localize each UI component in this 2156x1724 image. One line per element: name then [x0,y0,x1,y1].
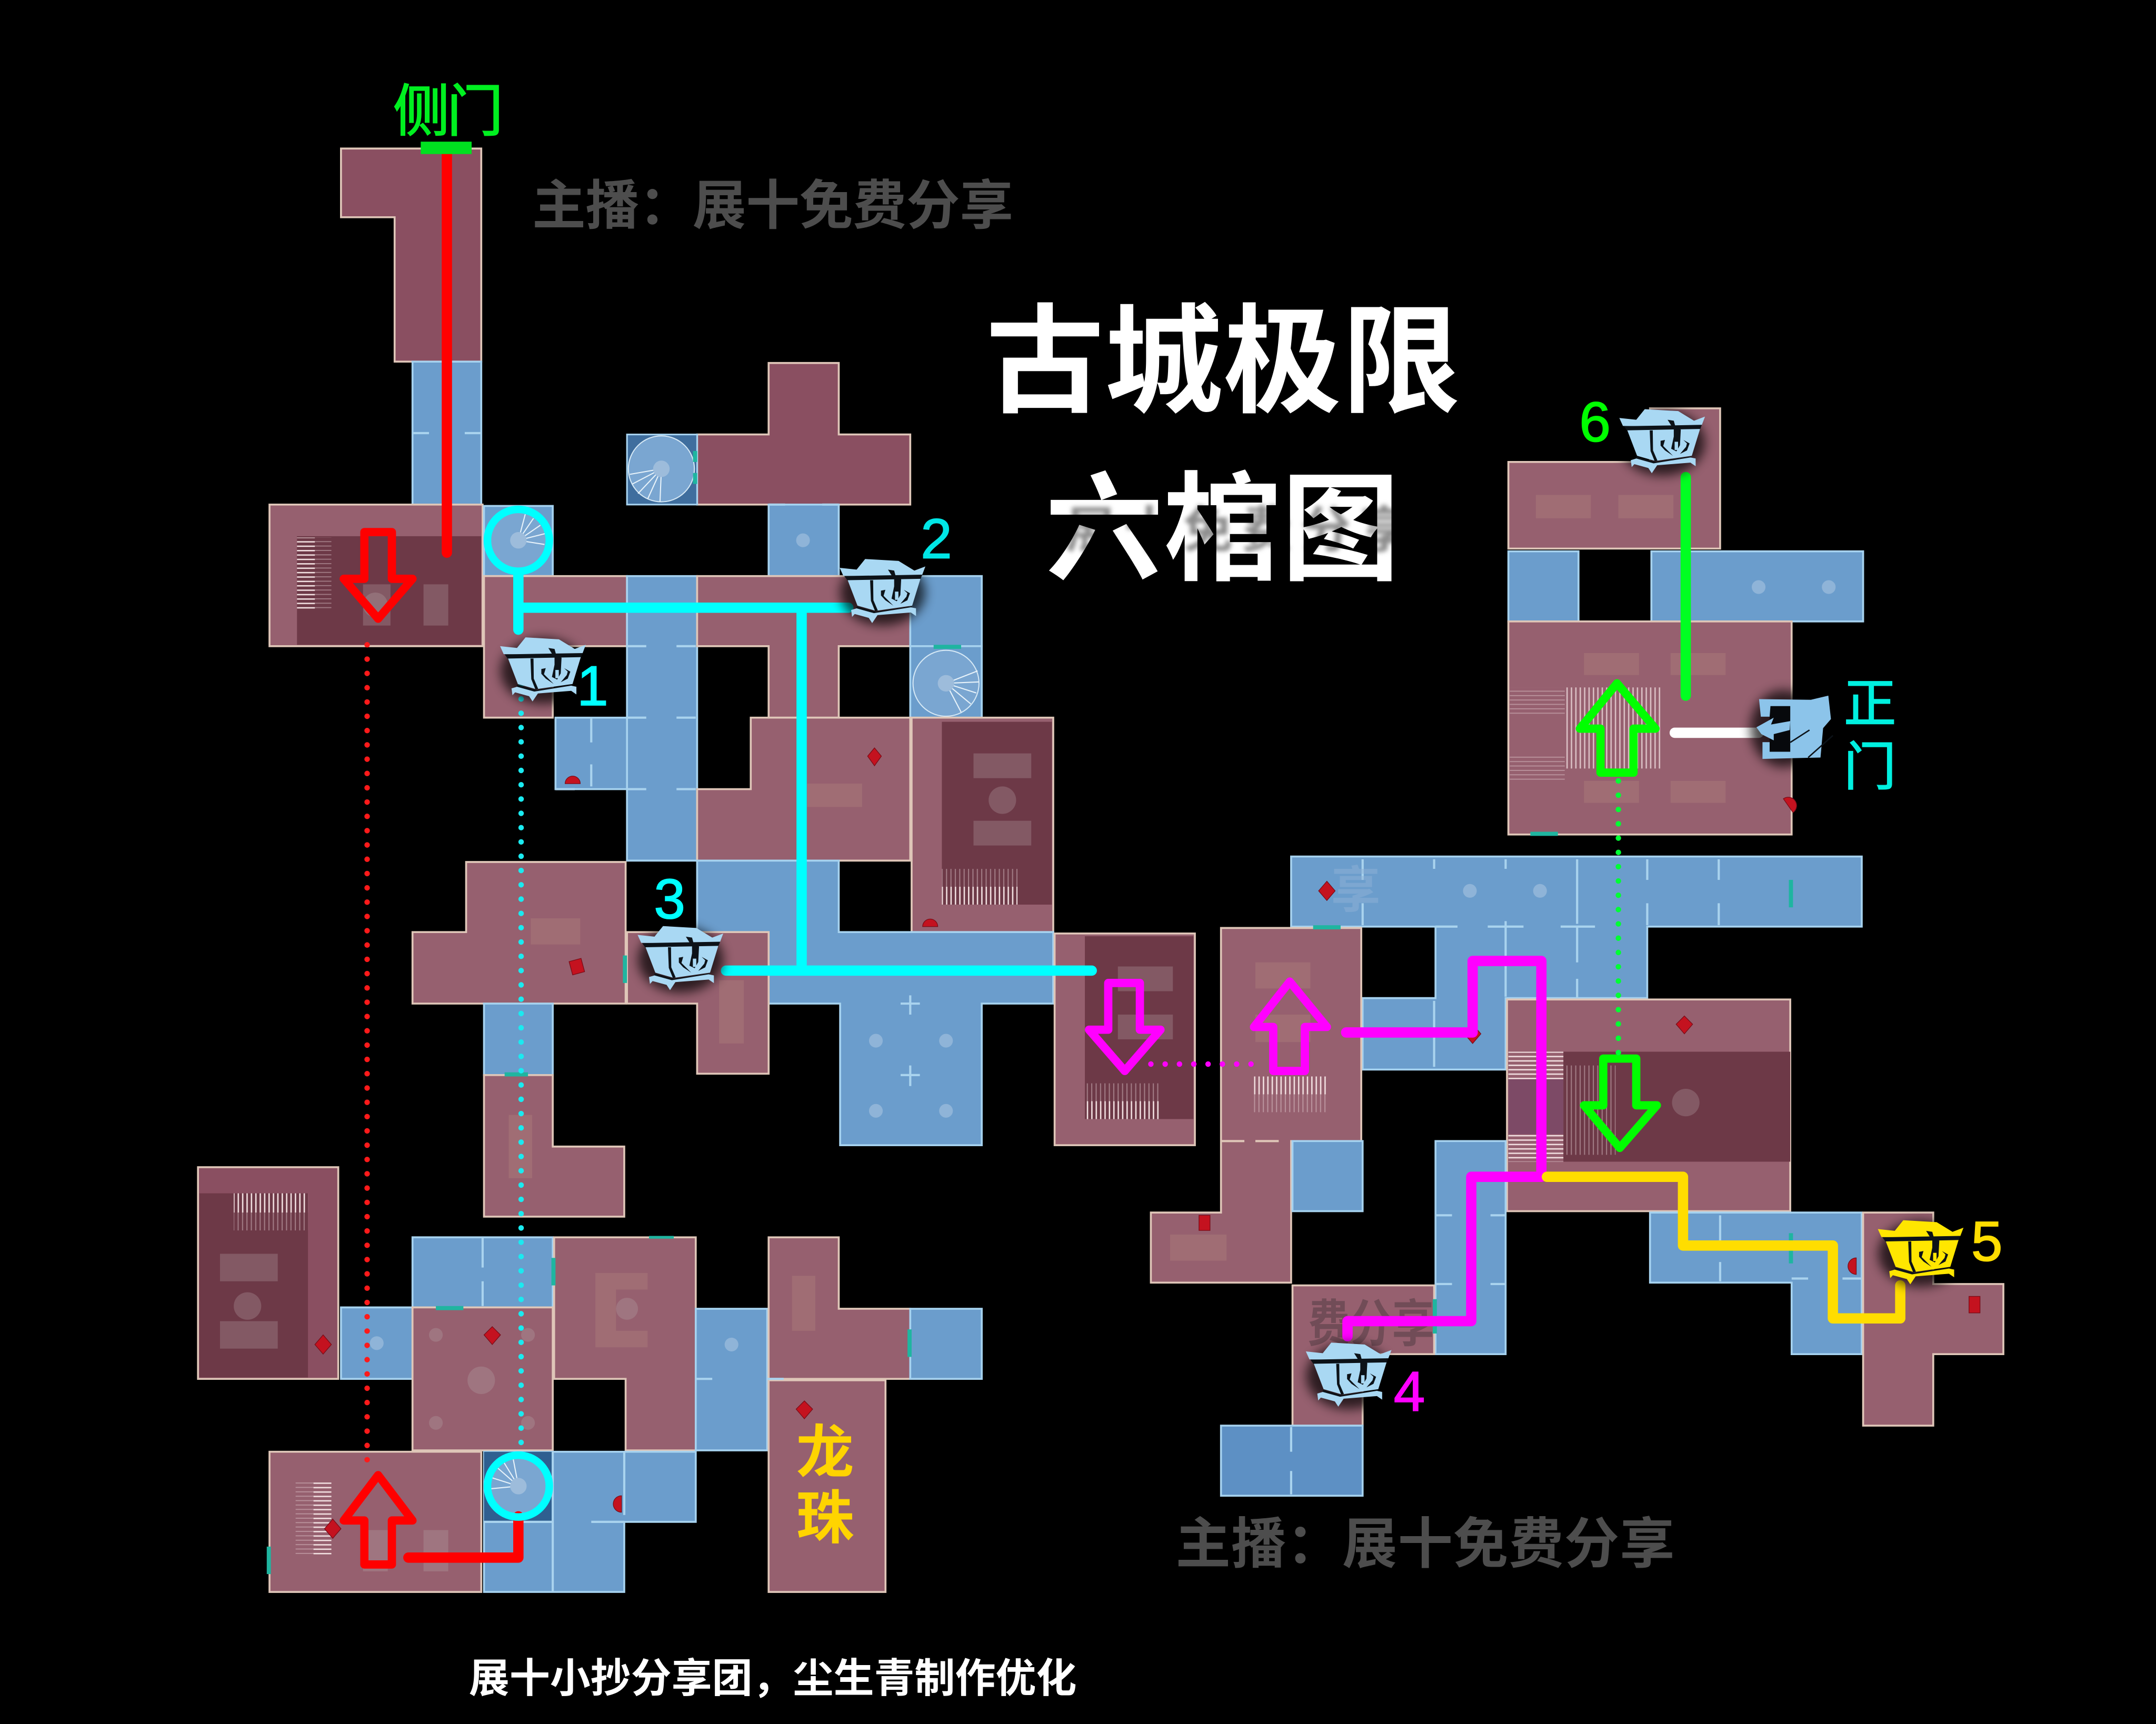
route: cyan spiral marker bottom [487,1455,550,1517]
room: blue room right of coffin 2 [910,576,982,646]
route: magenta arrow down [1089,983,1161,1071]
room: coffin 5 chamber [1863,1212,2003,1426]
room: blue column lower [696,1309,767,1450]
room: long blue gallery [1291,857,1862,1069]
room: dark stair room [912,718,1053,932]
room: coffin 4 chamber [1293,1286,1434,1426]
room: main entrance hall [1509,622,1792,835]
room: blue connector [768,505,839,576]
icon: coffin 1 [500,637,586,704]
route: cyan path to coffins 1 and 2 [518,573,849,630]
room: magenta arrow hall [1151,928,1361,1282]
title line 2: 六棺图 [1045,464,1400,596]
teal doors [267,451,1793,1574]
watermark fragment on coffin 4 room: 费分享 [1307,1297,1434,1353]
room: blue wing to coffin 5 [1650,1212,1862,1354]
room: final stair room [270,1452,481,1592]
room: lower blue block [484,1452,696,1592]
number 4: 4 [1394,1359,1425,1422]
number 6: 6 [1579,390,1611,454]
icon: coffin 2 [840,559,925,626]
watermark top: 主播：展十免费分享 [532,176,1013,236]
title line 1: 古城极限 [986,296,1460,428]
room: small blue side room [555,718,627,789]
room: blue T hall [697,860,1053,1145]
room: blue below magenta hall [1293,1141,1363,1211]
room: red cross lower [768,1237,910,1379]
room: blue small left [341,1307,413,1379]
number 5: 5 [1971,1210,2002,1273]
route: cyan spiral marker top [487,509,550,572]
room: central red L [697,718,910,860]
route: magenta path to coffin 4 [1346,961,1541,1336]
route: green arrow up [1580,683,1655,773]
room: blue end room [910,1309,982,1379]
watermark bottom: 主播：展十免费分享 [1175,1513,1675,1575]
route: red start arrow down [344,532,413,619]
icon: coffin 6 [1619,409,1705,476]
room: coffin 6 hall [1509,408,1720,548]
route: red arrow up [344,1475,413,1565]
room: blue double [413,1237,553,1307]
label: main door char 1: 正 [1844,675,1896,734]
wall notches [413,433,1862,1592]
room: blue double bottom [1221,1426,1363,1496]
room: red L lower [484,1075,624,1217]
red markers [315,748,1980,1538]
room: long blue column [627,576,697,860]
route: magenta dotted link [1151,1063,1265,1065]
room: lower-left dark stair room [198,1167,338,1379]
watermark fragment on gallery: 享 [1331,863,1381,918]
label: main door char 2: 门 [1844,738,1896,797]
room: red hall with columns [413,1307,553,1450]
room: spiral stair top [484,506,553,576]
room: blue connector mid [484,1004,553,1075]
route: cyan branch to coffin 3 [726,608,1092,970]
icon: coffin 5 [1878,1220,1963,1287]
map: left wing rooms [198,148,1053,1592]
room: blue corridor below side entrance [413,362,481,505]
side door green marker [421,142,472,154]
label: dragon pearl char 2: 珠 [796,1487,854,1551]
number 3: 3 [654,867,685,930]
room: side entrance L hall [341,148,481,362]
room: first stair room [270,505,483,646]
room: west cross [413,862,626,1004]
icon: coffin 3 [637,926,723,993]
route: cyan dotted drop [520,685,522,1452]
number 2: 2 [921,507,952,570]
route: magenta arrow up [1254,981,1327,1071]
room: top cross [697,363,910,505]
map: right wing rooms [1055,408,2003,1496]
room: coffin 1 chamber [484,576,627,718]
route: green path to coffin 6 [1684,477,1688,696]
icon: coffin 4 [1306,1342,1392,1409]
room: coffin 3 chamber [627,932,768,1074]
route: green arrow down [1584,1059,1657,1148]
route: red dotted drop [366,645,368,1466]
room: big dark stair hall [1507,999,1790,1211]
room: blue column below big hall [1435,1141,1505,1354]
number 1: 1 [577,654,608,717]
room: blue left of gap [1509,552,1579,622]
room: coffin 2 hall [697,576,910,718]
route: red exit to spiral [408,1516,518,1558]
icon: main door [1750,690,1833,767]
watermark ghost over title: 展十免费分享 [1065,503,1410,558]
room: spiral stair upper [627,435,697,505]
room: spiral stair lower [484,1452,553,1522]
room: dragon pearl long hall [768,1380,885,1592]
label: side door: 侧门 [393,79,503,143]
room: blue right wing [1651,552,1863,622]
room: red C shaped decor hall [554,1237,696,1450]
room: spiral stair right [910,646,982,718]
credit line: 展十小抄分享团，尘生青制作优化 [469,1656,1076,1701]
room: dark stair room centre [1055,934,1195,1145]
label: dragon pearl char 1: 龙 [796,1421,854,1485]
route: white entrance line [1675,731,1759,735]
route: red entry line [445,151,449,553]
route: green dotted link [1618,781,1620,1053]
route: yellow path to coffin 5 [1547,1177,1900,1318]
